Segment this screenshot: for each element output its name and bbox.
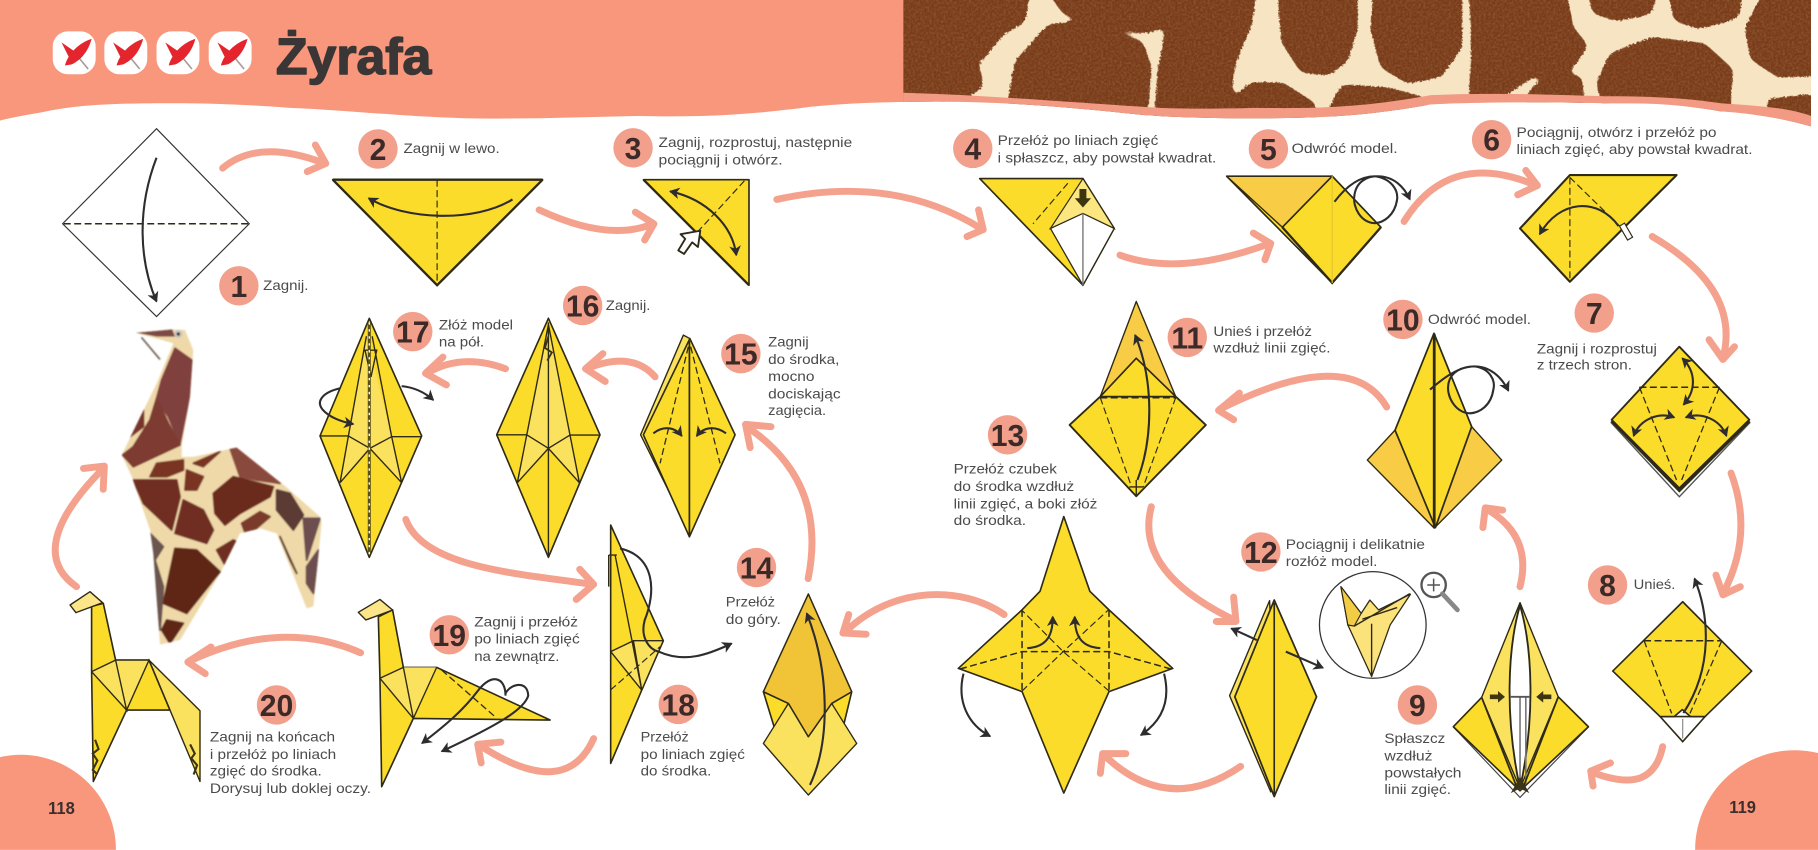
label 9: powstałych <box>1384 764 1461 780</box>
badge 18: 18 <box>662 689 695 722</box>
label 18: po liniach zgięć <box>641 746 745 762</box>
label 4 <box>998 132 1216 165</box>
panel: step 14 <box>726 548 857 795</box>
page corner right with number: 119 <box>1729 797 1756 817</box>
flow arrow 5 to 6 <box>1404 170 1537 221</box>
diagram 3 <box>643 180 749 285</box>
label 17 <box>439 316 513 350</box>
label 13: do środka wzdłuż <box>954 478 1074 494</box>
icon: difficulty 2 <box>104 31 147 74</box>
label 20: Dorysuj lub doklej oczy. <box>210 780 371 796</box>
label 7: z trzech stron. <box>1537 356 1632 372</box>
diagram 4 <box>980 179 1114 285</box>
label 14 <box>726 593 781 627</box>
label 9: linii zgięć. <box>1384 781 1451 797</box>
panel: step 4 <box>953 129 1216 285</box>
badge 2: 2 <box>370 134 386 167</box>
page corner right with number <box>1695 750 1818 850</box>
label 17: Złóż model <box>439 316 513 332</box>
flow arrow 8 to 9 <box>1591 747 1663 786</box>
inset circle <box>1319 572 1426 678</box>
flow arrow 3 to 4 <box>777 191 983 237</box>
badge 4 <box>953 129 992 168</box>
header wavy band under photo <box>903 93 1811 126</box>
label 15: mocno <box>768 368 815 384</box>
diagram 19 <box>358 599 550 787</box>
badge 3 <box>613 128 653 168</box>
header band: salmon <box>0 0 909 121</box>
panel: step 9 <box>1383 603 1588 797</box>
badge 14: 14 <box>740 553 774 586</box>
badge 6: 6 <box>1483 125 1500 158</box>
flow arrow 7 to 8 <box>1716 473 1741 595</box>
label 18: Przełóż <box>641 728 689 744</box>
title: Żyrafa <box>276 28 432 85</box>
flow arrow 10 to 11 <box>1219 376 1387 420</box>
diagram 12 <box>1230 600 1323 797</box>
label 9 <box>1383 730 1461 797</box>
label 7 <box>1537 341 1657 372</box>
label 20: i przełóż po liniach <box>210 746 336 762</box>
badge 5: 5 <box>1260 134 1277 167</box>
flow arrow 1 to 2 <box>223 145 326 172</box>
diagram 13 <box>958 517 1173 793</box>
flow arrow 9 to 10 <box>1483 508 1523 587</box>
label 9: wzdłuż <box>1383 748 1432 764</box>
badge 19: 19 <box>433 620 466 653</box>
label 7: Zagnij i rozprostuj <box>1537 341 1657 357</box>
label 17: na pół. <box>439 334 484 350</box>
label 18 <box>641 728 745 779</box>
flow arrow 14 to 15 <box>746 424 812 579</box>
label 13: Przełóż czubek <box>954 461 1058 477</box>
diagram 20 <box>70 592 200 781</box>
flow arrow 6 to 7 <box>1652 237 1735 359</box>
diagram 17 <box>320 318 433 557</box>
icon: difficulty 4 <box>209 31 252 74</box>
badge 3: 3 <box>625 133 641 166</box>
badge 12: 12 <box>1244 537 1278 570</box>
flow arrow 11 to 12 <box>1149 507 1236 621</box>
diagram 6 <box>1520 175 1677 282</box>
panel: step 2 <box>333 129 543 285</box>
label 20: Zagnij na końcach <box>210 728 335 744</box>
label 1: Zagnij. <box>263 277 308 293</box>
icon row: difficulty cranes <box>53 31 252 74</box>
label 6 <box>1517 124 1752 157</box>
icon: difficulty 1 <box>53 31 96 74</box>
label 18: do środka. <box>641 763 711 779</box>
label 3: Zagnij, rozprostuj, następnie <box>659 134 852 150</box>
flow arrow 2 to 3 <box>539 210 654 240</box>
badge 16: 16 <box>566 291 599 324</box>
label 19: Zagnij i przełóż <box>474 614 578 630</box>
diagram 11 <box>1070 301 1206 496</box>
label 13 <box>954 461 1097 528</box>
badge 17: 17 <box>396 317 430 350</box>
label 9: Spłaszcz <box>1384 730 1445 746</box>
label 19: po liniach zgięć <box>474 630 580 646</box>
flow arrow 18 to 19 <box>478 739 594 772</box>
flow arrow 20 to photo <box>55 466 104 587</box>
label 4: Przełóż po liniach zgięć <box>998 132 1158 148</box>
page corner left with number <box>0 755 116 850</box>
diagram 9 <box>1453 603 1588 797</box>
label 20: zgięć do środka. <box>210 763 322 779</box>
badge 1 <box>219 266 259 306</box>
badge 11 <box>1168 318 1207 357</box>
diagram 8 <box>1613 579 1752 742</box>
label 12: Pociągnij i delikatnie <box>1286 536 1425 552</box>
panel: step 17 <box>320 312 513 557</box>
header: giraffe fur photo <box>893 0 1818 133</box>
flow arrow 12 to 13 <box>1100 754 1241 789</box>
flow arrow 17 to 18 <box>406 519 594 599</box>
label 19 <box>474 614 580 664</box>
badge 1: 1 <box>230 271 247 304</box>
label 12 <box>1286 536 1425 569</box>
flow arrow 15 to 16 <box>586 354 655 381</box>
label 10: Odwróć model. <box>1428 311 1531 327</box>
panel: step 19 <box>358 599 580 787</box>
badge 11: 11 <box>1171 322 1203 355</box>
flow arrow 13 to 14 <box>843 595 1004 634</box>
badge 9: 9 <box>1409 690 1426 723</box>
diagram 10 <box>1367 333 1508 528</box>
badge 13: 13 <box>991 420 1024 453</box>
panel: step 15 <box>641 334 841 537</box>
label 8: Unieś. <box>1634 576 1675 592</box>
label 3 <box>659 134 852 168</box>
label 6: liniach zgięć, aby powstał kwadrat. <box>1517 141 1752 157</box>
label 15: Zagnij <box>768 334 809 350</box>
panel: step 10 <box>1367 300 1531 528</box>
label 14: do góry. <box>726 611 781 627</box>
label 6: Pociągnij, otwórz i przełóż po <box>1517 124 1717 140</box>
label 13: linii zgięć, a boki złóż <box>954 495 1097 511</box>
label 19: na zewnątrz. <box>474 648 559 664</box>
label 15: do środka, <box>768 351 839 367</box>
badge 2 <box>358 129 398 169</box>
diagram 5 <box>1227 176 1410 283</box>
badge 20: 20 <box>260 690 293 723</box>
diagram 7 <box>1612 347 1749 497</box>
label 4: i spłaszcz, aby powstał kwadrat. <box>998 149 1216 165</box>
badge 7 <box>1575 293 1614 333</box>
flow arrow 4 to 5 <box>1120 233 1271 264</box>
badge 8 <box>1588 565 1627 605</box>
photo: finished origami giraffe <box>116 325 325 649</box>
badge 5 <box>1249 129 1288 169</box>
icon: magnifier <box>1421 573 1457 610</box>
label 14: Przełóż <box>726 593 775 609</box>
label 15: dociskając <box>768 385 841 401</box>
panel: step 1 <box>63 129 308 317</box>
badge 10: 10 <box>1386 304 1420 337</box>
label 15: zagięcia. <box>768 402 826 418</box>
panel: step 5 <box>1227 129 1410 283</box>
panel: step 6 <box>1472 120 1752 282</box>
panel: step 18 <box>609 525 745 779</box>
label 11: wzdłuż linii zgięć. <box>1212 339 1330 355</box>
panel: step 12 <box>1230 532 1457 797</box>
diagram 16 <box>497 318 600 557</box>
badge 6 <box>1472 120 1511 159</box>
panel: step 8 <box>1588 565 1752 742</box>
flow arrow 19 to 20 <box>188 637 361 674</box>
badge 15: 15 <box>724 339 758 372</box>
label 3: pociągnij i otwórz. <box>659 152 783 168</box>
panel: step 3 <box>613 128 852 285</box>
panel: step 13 <box>954 415 1173 793</box>
diagram 2 <box>333 180 543 285</box>
diagram 14 <box>763 594 857 795</box>
page corner left with number: 118 <box>48 798 75 818</box>
flow arrow 16 to 17 <box>426 357 506 385</box>
label 11 <box>1212 323 1330 355</box>
panel: step 7 <box>1537 293 1749 497</box>
label 20 <box>210 728 371 796</box>
badge 4: 4 <box>964 133 981 166</box>
label 5: Odwróć model. <box>1292 140 1398 156</box>
label 16: Zagnij. <box>606 297 650 313</box>
panel: step 20 <box>70 592 371 796</box>
label 11: Unieś i przełóż <box>1213 323 1312 339</box>
label 15 <box>768 334 841 418</box>
icon: difficulty 3 <box>157 31 199 74</box>
label 13: do środka. <box>954 512 1026 528</box>
badge 8: 8 <box>1599 570 1616 603</box>
badge 7: 7 <box>1586 298 1603 331</box>
diagram 15 <box>641 335 735 537</box>
diagram 18 <box>609 525 732 763</box>
badge 9 <box>1398 685 1437 725</box>
panel: step 16 <box>497 286 650 557</box>
panel: step 11 <box>1070 301 1330 496</box>
label 2: Zagnij w lewo. <box>403 140 500 156</box>
label 12: rozłóż model. <box>1286 553 1377 569</box>
diagram 1 <box>63 129 249 317</box>
